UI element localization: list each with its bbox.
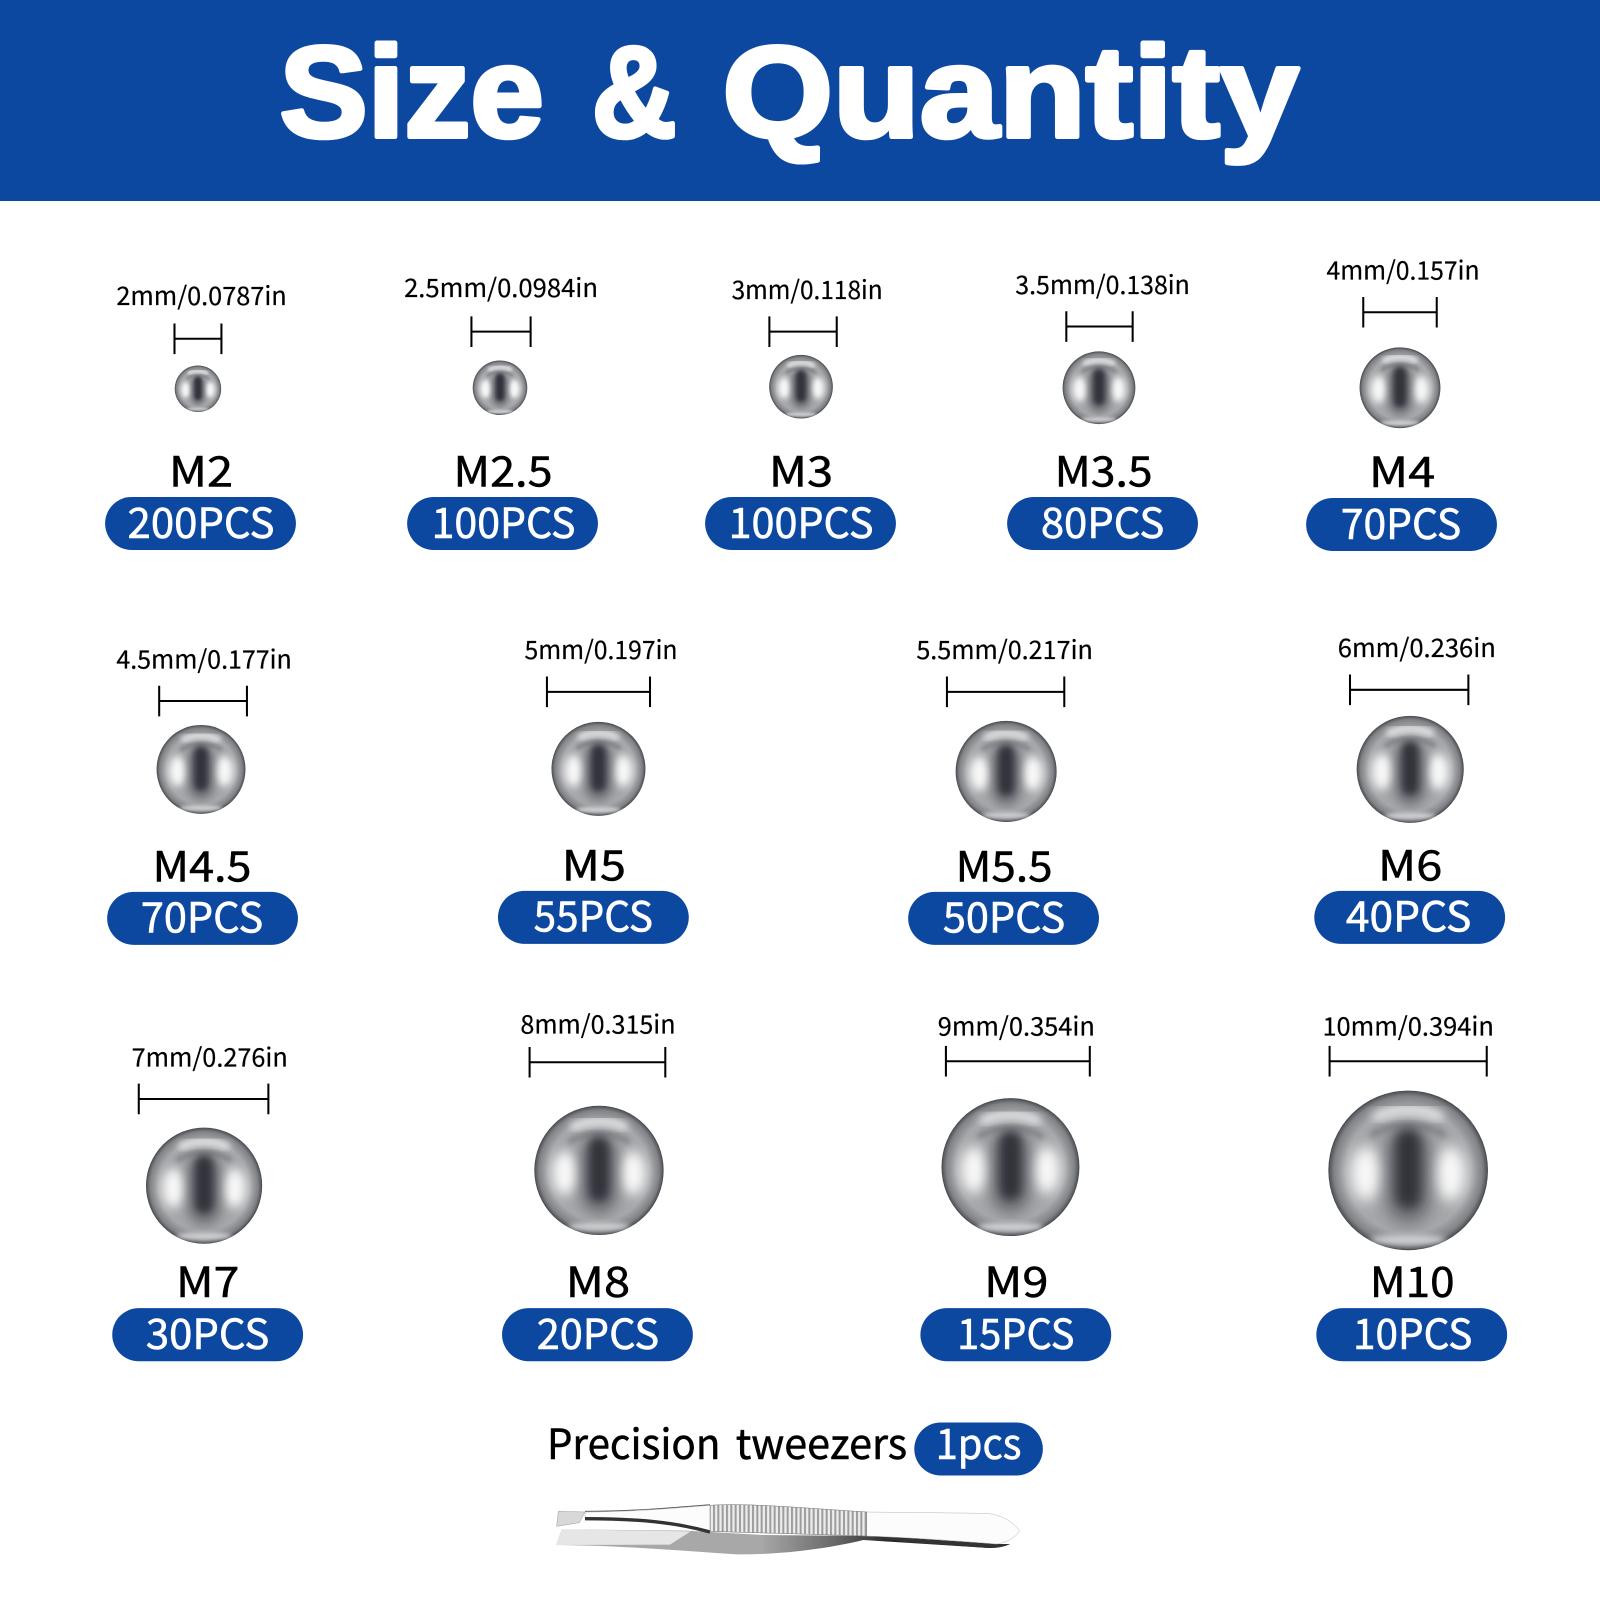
steel ball — [1357, 716, 1464, 823]
steel ball — [942, 1098, 1079, 1236]
steel ball — [1360, 347, 1440, 428]
quantity pill: 100PCS — [729, 490, 873, 551]
item: M5.5 — [908, 630, 1099, 946]
dimension bracket — [471, 316, 531, 347]
title banner — [0, 0, 1600, 201]
dimension bracket — [946, 1046, 1090, 1077]
steel ball — [473, 360, 527, 415]
title: Size — [280, 21, 544, 165]
dimension label: 2.5mm/0.0984in — [404, 268, 598, 305]
dimension bracket — [159, 686, 247, 716]
dimension label: 10mm/0.394in — [1322, 1007, 1494, 1044]
steel ball — [175, 366, 221, 412]
steel ball — [157, 725, 245, 814]
size label: M2 — [169, 439, 233, 500]
quantity pill: 50PCS — [943, 885, 1065, 946]
size label: M9 — [984, 1249, 1048, 1310]
size label: M3.5 — [1055, 439, 1153, 500]
steel ball — [146, 1128, 262, 1244]
quantity pill: 10PCS — [1353, 1301, 1472, 1362]
steel ball — [551, 722, 645, 816]
dimension label: 4mm/0.157in — [1327, 251, 1480, 288]
steel ball — [956, 721, 1057, 822]
steel ball — [1063, 351, 1135, 424]
item: M3 — [705, 270, 896, 551]
quantity pill — [502, 1301, 693, 1362]
dimension label: 3mm/0.118in — [732, 270, 883, 307]
quantity pill: 80PCS — [1041, 490, 1164, 551]
item: M2.5 — [404, 268, 598, 551]
quantity pill: 55PCS — [534, 884, 653, 945]
steel ball — [534, 1106, 664, 1235]
title: & — [592, 21, 677, 165]
quantity pill: 30PCS — [146, 1301, 269, 1362]
item: M7 — [112, 1037, 303, 1362]
tweezers quantity pill — [914, 1411, 1043, 1476]
item: M3.5 — [1007, 265, 1198, 551]
steel ball — [1328, 1091, 1488, 1250]
quantity pill — [112, 1301, 303, 1362]
tweezers label: tweezers — [736, 1411, 907, 1472]
size label: M5.5 — [956, 834, 1053, 895]
size label: M8 — [566, 1249, 630, 1310]
dimension label: 6mm/0.236in — [1338, 628, 1496, 665]
size label: M6 — [1378, 833, 1442, 894]
size label: M2.5 — [454, 439, 553, 500]
title — [280, 21, 1299, 165]
dimension label: 8mm/0.315in — [520, 1005, 676, 1042]
dimension bracket — [769, 316, 837, 347]
item: M9 — [920, 1007, 1111, 1362]
size label: M5 — [562, 833, 626, 894]
item: M5 — [498, 630, 689, 945]
quantity pill — [1007, 490, 1198, 551]
dimension bracket — [174, 323, 221, 354]
steel ball — [769, 355, 833, 419]
size label: M3 — [769, 439, 833, 500]
item: M4.5 — [107, 639, 298, 946]
tweezers label: Precision — [547, 1411, 720, 1472]
item: M6 — [1314, 628, 1505, 945]
quantity pill — [1316, 1301, 1507, 1362]
dimension bracket — [547, 677, 650, 707]
size label: M4 — [1369, 439, 1435, 500]
quantity pill: 70PCS — [1341, 491, 1461, 552]
quantity pill: 70PCS — [141, 885, 263, 946]
dimension bracket — [1350, 674, 1468, 705]
quantity pill — [107, 885, 298, 946]
item: M8 — [502, 1005, 693, 1362]
dimension label: 9mm/0.354in — [938, 1007, 1095, 1044]
dimension bracket — [1330, 1046, 1487, 1077]
item: M4 — [1306, 251, 1497, 552]
size label: M10 — [1370, 1249, 1455, 1310]
dimension bracket — [1363, 297, 1437, 328]
dimension label: 5.5mm/0.217in — [916, 630, 1093, 667]
dimension bracket — [530, 1047, 665, 1078]
quantity pill: 40PCS — [1346, 884, 1471, 945]
dimension bracket — [947, 677, 1064, 707]
dimension label: 7mm/0.276in — [132, 1037, 288, 1074]
title: Quantity — [722, 21, 1299, 165]
tweezers label — [547, 1411, 907, 1472]
quantity pill — [920, 1301, 1111, 1362]
quantity pill: 200PCS — [128, 490, 274, 551]
dimension label: 3.5mm/0.138in — [1015, 265, 1190, 302]
quantity pill: 15PCS — [957, 1301, 1074, 1362]
item: M2 — [105, 276, 296, 551]
tweezers quantity pill: 1pcs — [936, 1411, 1021, 1472]
size label: M7 — [176, 1249, 239, 1310]
dimension label: 2mm/0.0787in — [116, 276, 287, 313]
dimension label: 4.5mm/0.177in — [116, 639, 292, 676]
quantity pill — [498, 884, 689, 945]
quantity pill — [1306, 491, 1497, 552]
quantity pill: 20PCS — [537, 1301, 659, 1362]
quantity pill — [908, 885, 1099, 946]
icon: precision tweezers — [556, 1505, 1019, 1554]
quantity pill — [1314, 884, 1505, 945]
size label: M4.5 — [153, 834, 252, 895]
quantity pill: 100PCS — [432, 490, 576, 551]
dimension bracket — [1066, 311, 1133, 342]
dimension bracket — [139, 1084, 268, 1114]
item: M10 — [1316, 1007, 1507, 1362]
dimension label: 5mm/0.197in — [524, 630, 678, 667]
